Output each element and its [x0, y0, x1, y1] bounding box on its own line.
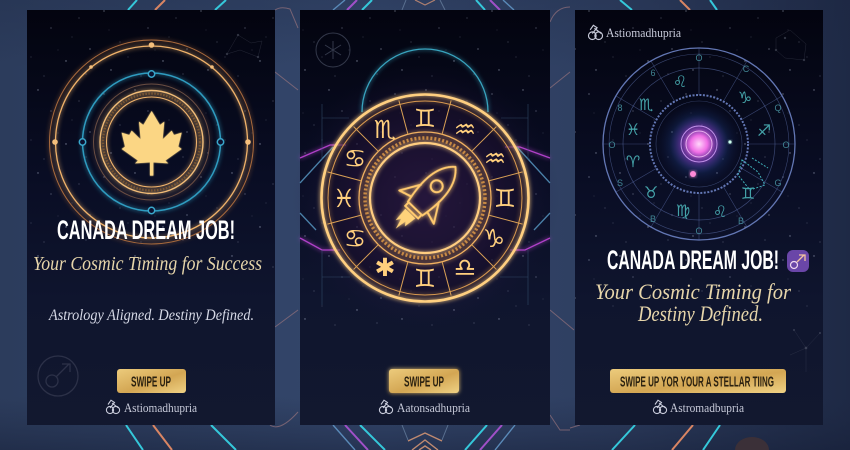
wheel symbols: B	[738, 216, 744, 226]
wheel symbols: ♉︎	[644, 183, 658, 202]
icon: maple leaf	[122, 111, 182, 176]
wheel symbols: O	[695, 53, 703, 63]
cosmic core glow	[657, 102, 768, 190]
icon: star circle	[316, 33, 350, 67]
constellation top right	[775, 30, 806, 61]
zodiac symbols: ♊︎	[494, 184, 516, 213]
constellation lower right	[790, 329, 821, 372]
brand logo: Aatonsadhupria	[397, 400, 470, 415]
zodiac symbols: ♑︎	[483, 224, 505, 253]
wheel symbols: ♌︎	[713, 202, 727, 221]
button: swipe up: SWIPE UP	[404, 374, 444, 390]
wheel symbols: O	[782, 140, 790, 150]
zodiac symbols: ♎︎	[454, 253, 476, 282]
orbit rings	[50, 40, 254, 244]
button: swipe up for stellar timing	[610, 369, 786, 393]
panel: cosmic wheel card	[575, 10, 823, 425]
wheel symbols: ♈︎	[626, 152, 640, 171]
icon: mars badge purple	[787, 250, 809, 272]
subtitle: Your Cosmic Timing for Success	[33, 254, 262, 275]
zodiac symbols: ♏︎	[374, 115, 396, 144]
wheel symbols: 6	[650, 68, 656, 78]
wheel symbols: S	[617, 178, 623, 188]
zodiac symbols: ✱	[375, 253, 395, 282]
astrology wheel	[603, 48, 795, 240]
wheel symbols: ♐︎	[757, 121, 771, 140]
zodiac symbols: ♒︎	[484, 144, 506, 173]
blue arc	[362, 49, 488, 112]
zodiac wheel	[322, 94, 528, 302]
zodiac symbols: ♒︎	[454, 115, 476, 144]
icon: rocket	[378, 150, 473, 245]
wheel symbols: C	[743, 64, 750, 74]
wheel symbols: ♑︎	[738, 88, 752, 107]
subtitle: Destiny Defined.	[637, 301, 763, 326]
subtitle: Your Cosmic Timing for	[595, 279, 791, 304]
constellation top right	[226, 34, 262, 58]
orbit dots	[52, 42, 251, 214]
brand logo: Astiomadhupria	[124, 400, 197, 415]
subtitle	[595, 279, 791, 326]
wheel symbols: ♓︎	[626, 120, 640, 139]
brand logo: Astromadbupria	[670, 400, 744, 415]
wheel symbols: Q	[774, 103, 782, 113]
heading: CANADA DREAM JOB!	[57, 215, 235, 245]
wheel symbols: ♌︎	[673, 72, 687, 91]
wheel symbols: ♏︎	[639, 95, 653, 114]
wheel symbols: B	[650, 214, 656, 224]
tagline: Astrology Aligned. Destiny Defined.	[48, 307, 254, 324]
panel: rocket zodiac card	[290, 10, 560, 425]
wheel symbols: O	[695, 226, 703, 236]
zodiac symbols: ♊︎	[414, 104, 436, 133]
icon: mars badge	[38, 356, 78, 396]
button: swipe up: SWIPE UP	[131, 374, 171, 390]
wheel symbols: 8	[617, 103, 623, 113]
button: swipe up	[117, 369, 186, 393]
zodiac symbols: ♋︎	[344, 224, 366, 253]
zodiac symbols: ♊︎	[414, 264, 436, 293]
wheel symbols: ♍︎	[676, 201, 690, 220]
panel: maple leaf card	[27, 10, 275, 425]
zodiac symbols: ♓︎	[333, 184, 355, 213]
zodiac symbols: ♋︎	[344, 144, 366, 173]
wheel symbols: ♊︎	[741, 184, 755, 203]
wheel symbols: G	[774, 178, 782, 188]
neon side lines	[300, 104, 550, 305]
wheel symbols	[608, 53, 790, 236]
wheel symbols: O	[608, 140, 616, 150]
button: swipe up	[389, 369, 459, 393]
zodiac symbols	[333, 104, 516, 293]
brand logo top: Astiomadhupria	[606, 25, 681, 40]
